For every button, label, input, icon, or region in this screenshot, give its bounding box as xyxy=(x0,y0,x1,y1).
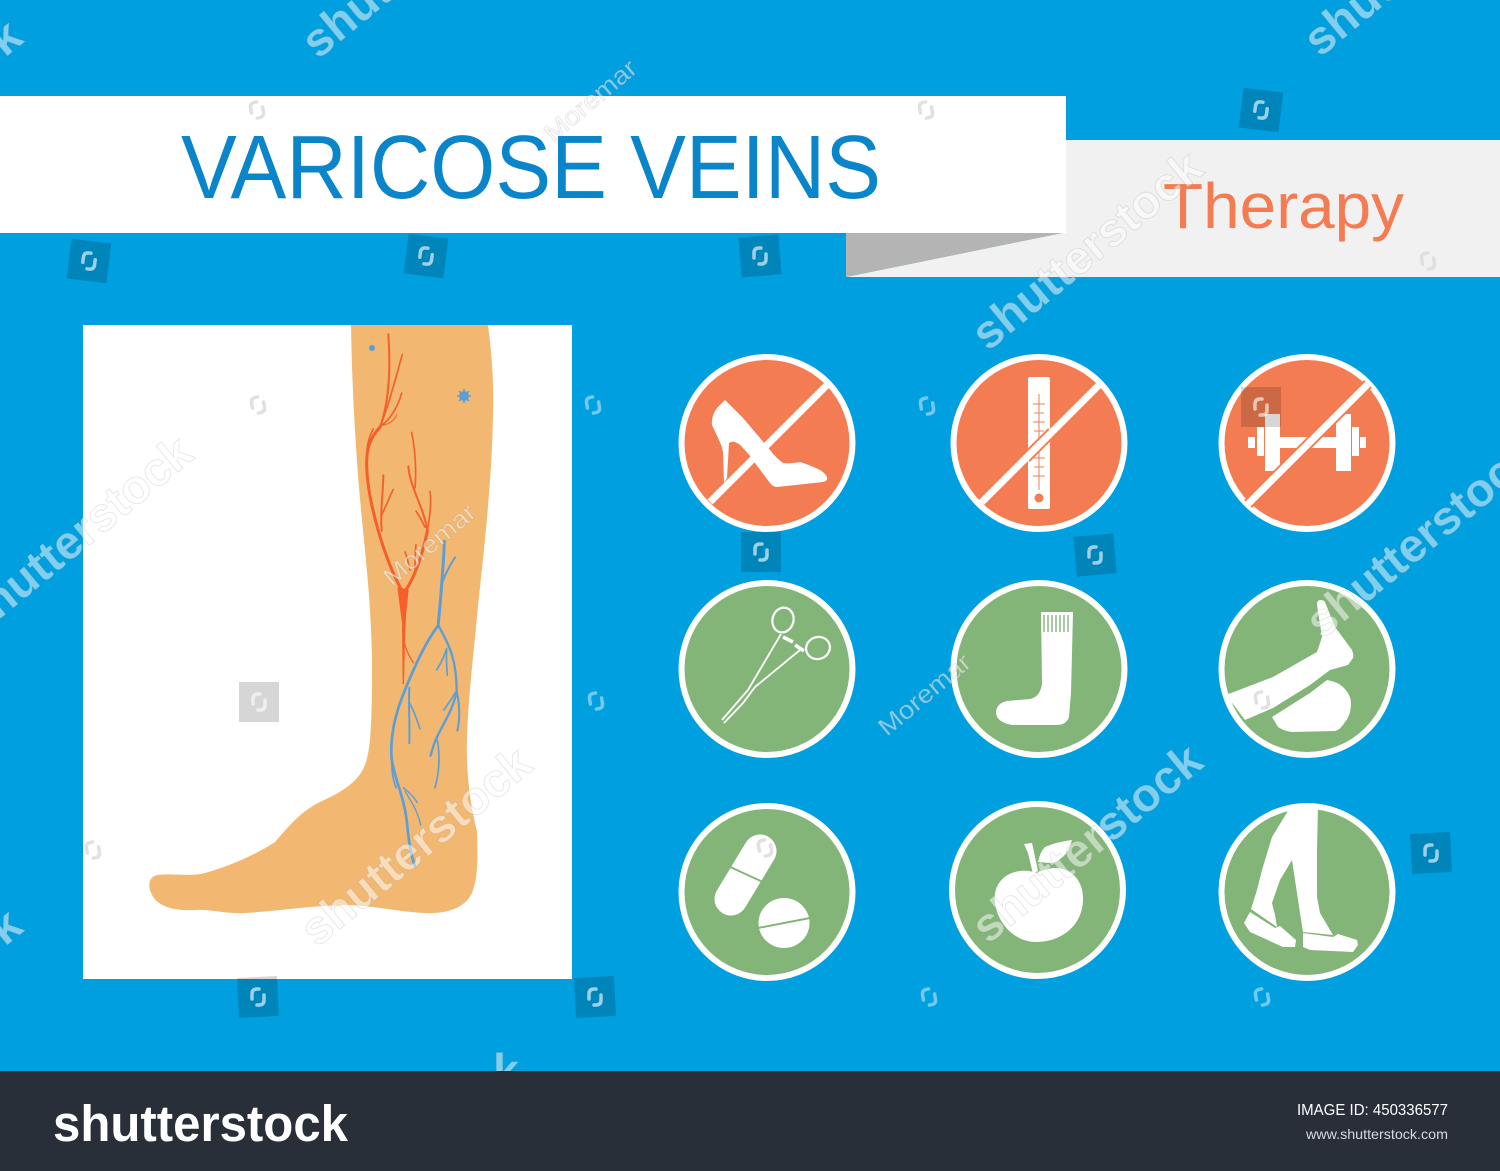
footer: website: www.shutterstock.com xyxy=(1305,1126,1448,1142)
icon: no heat / thermometer xyxy=(954,357,1124,529)
footer bar xyxy=(0,1071,1500,1171)
icon: compression sock xyxy=(954,583,1124,755)
watermark: shutterstock and author marks: shutterstock xyxy=(290,735,542,956)
watermark: shutterstock and author marks: Moremar xyxy=(378,498,482,592)
watermark: corner glyphs xyxy=(82,101,1437,1005)
watermark: shutterstock and author marks: shutterstock xyxy=(961,139,1213,360)
icon: leg elevated on cushion xyxy=(1222,583,1392,755)
varicose veins: blue xyxy=(391,541,459,866)
icon: pills xyxy=(682,806,852,978)
title: VARICOSE VEINS xyxy=(181,118,881,218)
icon: apple xyxy=(952,804,1123,976)
watermark: small outline glyphs on blue xyxy=(586,396,1269,1006)
icon: no weights / dumbbell xyxy=(1222,357,1392,529)
ribbon: Therapy band xyxy=(846,140,1500,277)
leg and foot xyxy=(149,325,493,913)
panel: leg illustration xyxy=(83,325,572,979)
icon: surgical forceps xyxy=(682,583,852,755)
ribbon: title band xyxy=(0,96,1066,233)
icon: no high heels xyxy=(682,357,852,529)
watermark: square badges xyxy=(67,88,1452,1018)
watermark: shutterstock and author marks: k xyxy=(493,1044,520,1097)
watermark: shutterstock and author marks: Moremar xyxy=(873,648,977,742)
watermark: small outline glyphs on light areas xyxy=(86,101,1435,859)
footer: image id: IMAGE ID: 450336577 xyxy=(1297,1102,1448,1119)
spider vein dots xyxy=(369,345,471,403)
watermark: shutterstock and author marks: shutterstock xyxy=(961,732,1213,953)
watermark: shutterstock and author marks: Moremar xyxy=(539,54,643,148)
varicose veins: red xyxy=(367,334,431,684)
footer logo: shutterstock: shutterstock xyxy=(53,1095,349,1152)
subtitle: Therapy: Therapy xyxy=(1163,170,1404,242)
icon: walking legs xyxy=(1222,806,1392,978)
